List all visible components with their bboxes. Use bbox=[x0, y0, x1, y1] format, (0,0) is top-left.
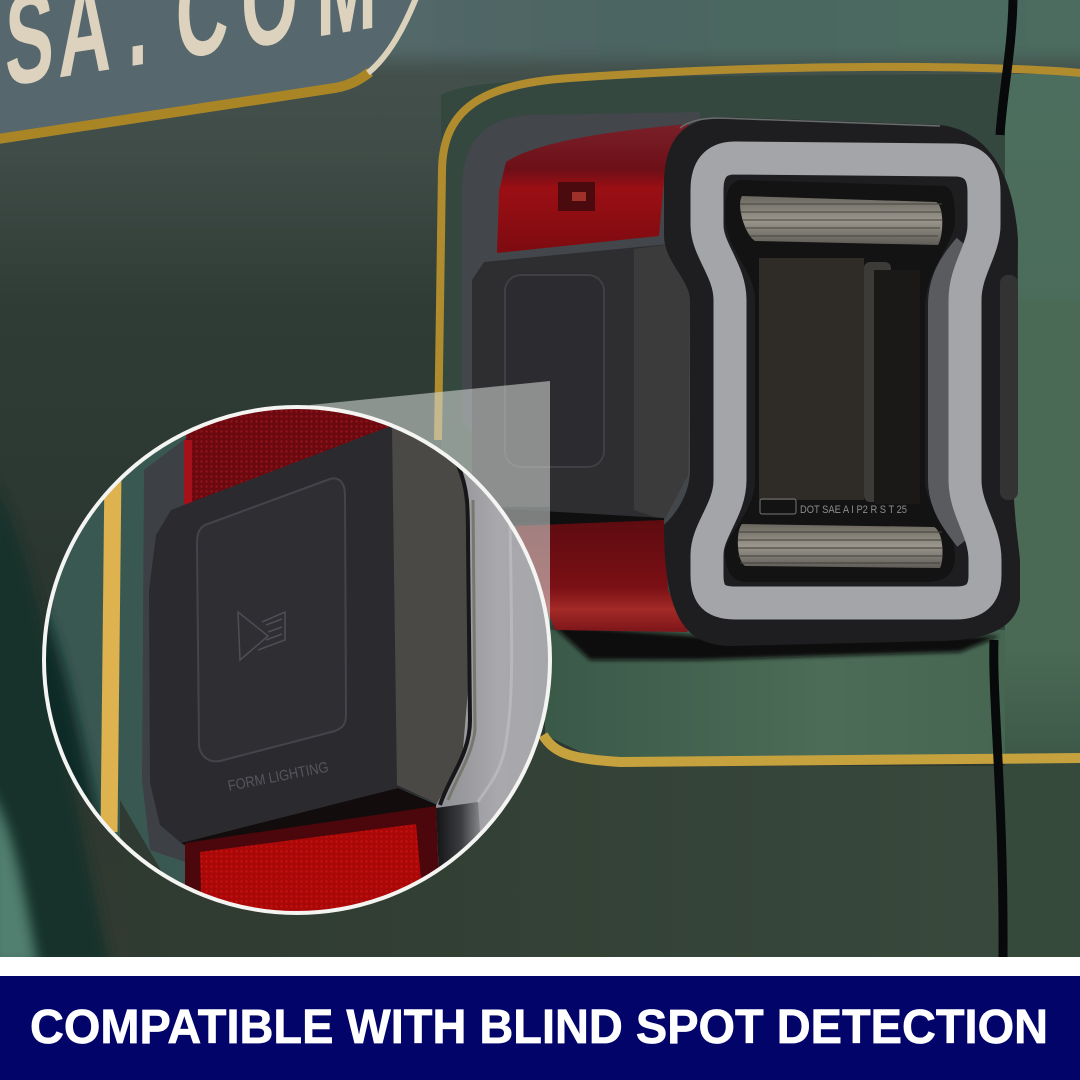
tail light assembly bbox=[462, 112, 1020, 660]
lamp housing bbox=[462, 112, 700, 524]
red reflector magnified bbox=[186, 409, 392, 502]
inner window bbox=[725, 180, 955, 582]
sensor panel magnified bbox=[149, 427, 468, 848]
upper LED bar bbox=[740, 196, 942, 245]
lamp shadow bbox=[552, 625, 1000, 660]
sensor cover panel bbox=[472, 244, 690, 528]
embossed radio icon bbox=[238, 612, 285, 660]
raised sensor square bbox=[197, 478, 346, 761]
seam edge bbox=[440, 465, 470, 805]
gold pinstripe lower bbox=[543, 735, 1080, 762]
white divider strip bbox=[0, 957, 1080, 976]
magnified detail circle bbox=[30, 400, 560, 930]
light tube bbox=[707, 158, 985, 603]
embossed brand: FORM LIGHTING bbox=[227, 759, 330, 795]
lower LED bar bbox=[738, 524, 942, 568]
lens top highlight bbox=[680, 118, 940, 128]
lens certification marking: DOT SAE A I P2 R S T 25 bbox=[800, 504, 907, 516]
glossy lower corner bbox=[436, 802, 480, 868]
lower red reflector bbox=[515, 520, 688, 632]
magnifier translucent beam bbox=[310, 381, 550, 628]
circle backdrop bbox=[48, 435, 436, 884]
lens certification marking bbox=[760, 499, 907, 516]
gold pinstripe upper bbox=[438, 67, 1080, 440]
smoked lens outer bbox=[664, 117, 1020, 646]
circle outline bbox=[44, 407, 550, 913]
title banner bbox=[0, 976, 1080, 1080]
decal gold outline bbox=[0, 0, 416, 139]
beam lower tint bbox=[502, 507, 550, 512]
housing edge bbox=[142, 438, 186, 862]
upper red reflector bbox=[497, 124, 689, 253]
title banner: COMPATIBLE WITH BLIND SPOT DETECTION bbox=[30, 1001, 1048, 1054]
body panel seam bbox=[994, 0, 1013, 957]
lower red reflector magnified bbox=[185, 806, 438, 892]
lens ring magnified bbox=[436, 471, 548, 866]
gold stripe in circle bbox=[109, 470, 113, 832]
inner tube shadow bbox=[939, 245, 966, 540]
right side tab bbox=[1000, 275, 1018, 500]
